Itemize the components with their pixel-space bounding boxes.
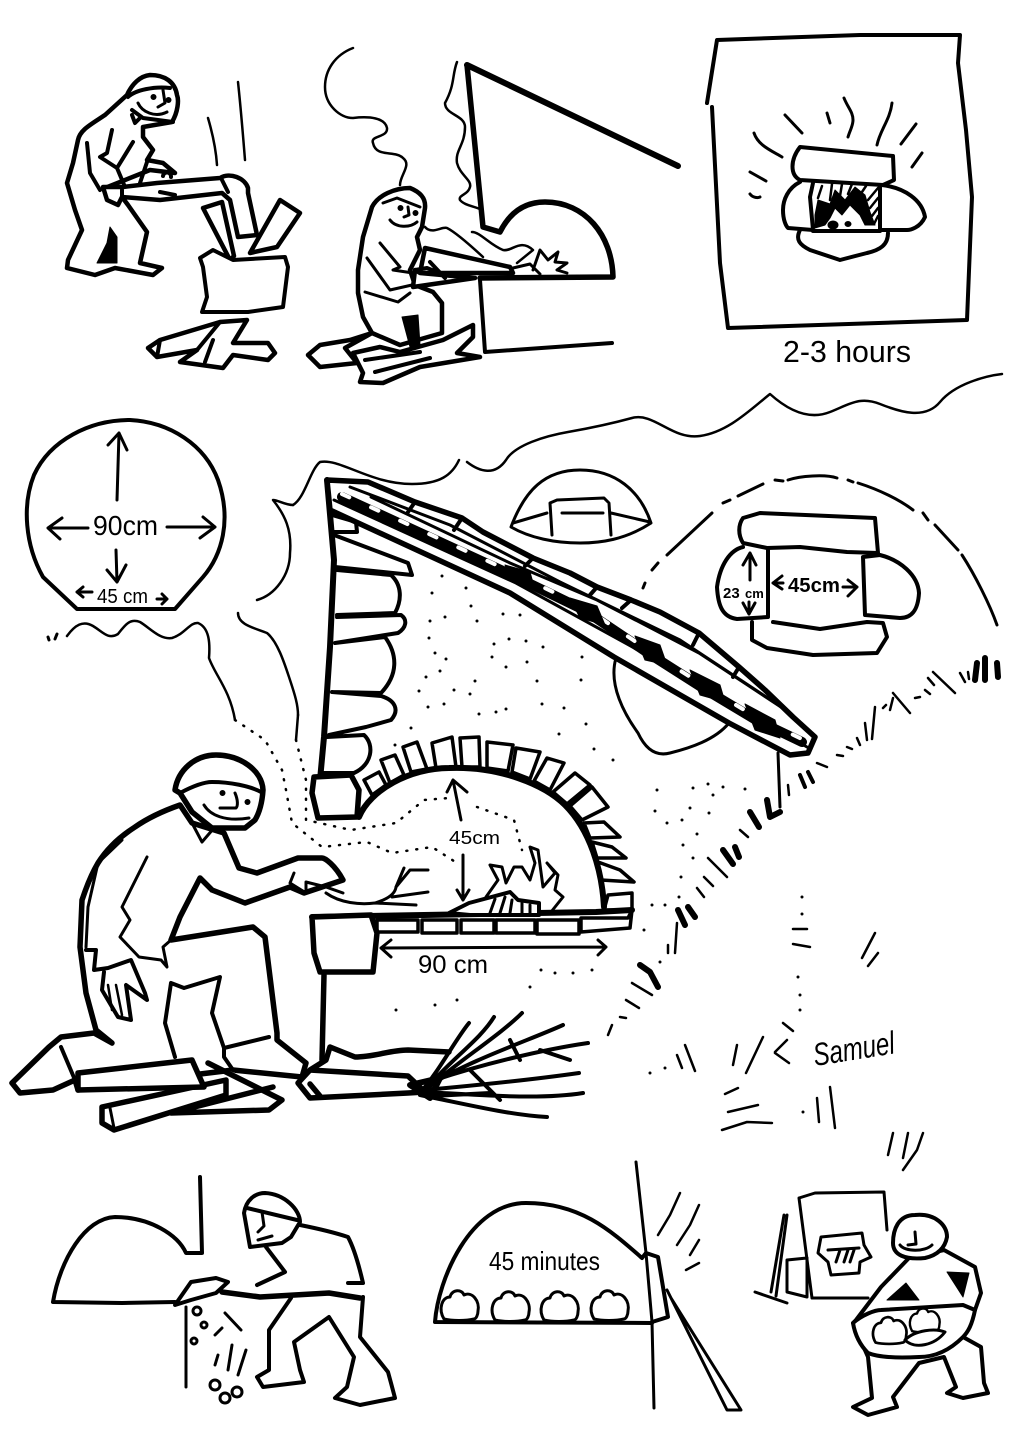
branch and arm (413, 248, 513, 287)
woodcutter details (87, 87, 173, 190)
oven outline (53, 1177, 202, 1303)
wood wedges (203, 202, 234, 260)
diameter circle: 45 cm (97, 586, 148, 608)
motion lines (658, 1193, 699, 1270)
panel: chopping wood (67, 75, 300, 368)
side lobe under roof (614, 658, 729, 754)
dashed arc (643, 476, 997, 625)
flame (486, 847, 563, 912)
wood pile (298, 1013, 588, 1117)
dimension: 45cm (447, 780, 500, 900)
diameter circle (27, 420, 225, 640)
logs (148, 320, 275, 368)
motion lines (208, 82, 245, 165)
peel (667, 1290, 741, 1410)
diameter circle: 90cm (93, 510, 158, 541)
man's logs (171, 1063, 282, 1113)
flowing smoke and fire (425, 227, 533, 263)
stone icon with dimensions (717, 513, 919, 655)
motion lines (888, 1133, 923, 1170)
glow rays (750, 98, 922, 198)
basket of bread (853, 1305, 975, 1358)
head (175, 755, 263, 828)
tools (755, 1215, 807, 1303)
person kneeling (308, 188, 442, 367)
oven wall background (799, 1192, 887, 1298)
baker with shovel (244, 1193, 363, 1285)
woodcutter figure (67, 75, 178, 275)
chopping block (200, 250, 288, 312)
oven arch bricks (312, 737, 634, 1060)
hillside strokes (608, 672, 969, 1130)
chimney stones wall (312, 480, 412, 818)
axe (103, 176, 257, 237)
dimension: 90 cm (381, 940, 606, 979)
dome icon (511, 470, 651, 543)
wall outline (707, 35, 972, 328)
baker head (893, 1215, 947, 1258)
smoke (325, 48, 482, 210)
embers falling (191, 1307, 246, 1403)
wood pile (353, 325, 480, 383)
oven mouth stones (792, 147, 894, 185)
stone icon with dimensions: 45cm (788, 575, 840, 597)
panel: fire burning 2-3 hours (707, 35, 972, 369)
hanging hand (86, 950, 147, 1020)
dotted wall texture (395, 576, 803, 1112)
body and leg (12, 805, 343, 1093)
oven dome (435, 1203, 652, 1323)
stone icon with dimensions: cm (745, 586, 764, 601)
panel: taking out bread (755, 1133, 988, 1415)
dimension: 45cm: 45cm (449, 828, 500, 848)
dimension: 90 cm: 90 cm (418, 951, 488, 979)
hand with branch (290, 868, 428, 905)
fire inside oven (815, 187, 875, 228)
signature: Samuel (810, 1024, 898, 1073)
roof slates (327, 480, 815, 755)
main drawing: bread oven (12, 374, 1002, 1130)
baker holding basket (853, 1250, 988, 1415)
oven wall and roof (467, 65, 678, 166)
shovel (175, 1278, 228, 1305)
text: 45 minutes: 45 minutes (489, 1246, 600, 1276)
panel: baking 45 minutes (435, 1162, 741, 1410)
panel: removing embers (53, 1177, 395, 1405)
long wavy terrain (293, 374, 1002, 505)
panel: lighting the fire (308, 48, 678, 383)
breads (441, 1291, 478, 1320)
large kneeling man (12, 755, 428, 1093)
text: 2-3 hours: 2-3 hours (783, 334, 911, 369)
stone icon with dimensions: 23 (723, 585, 740, 602)
